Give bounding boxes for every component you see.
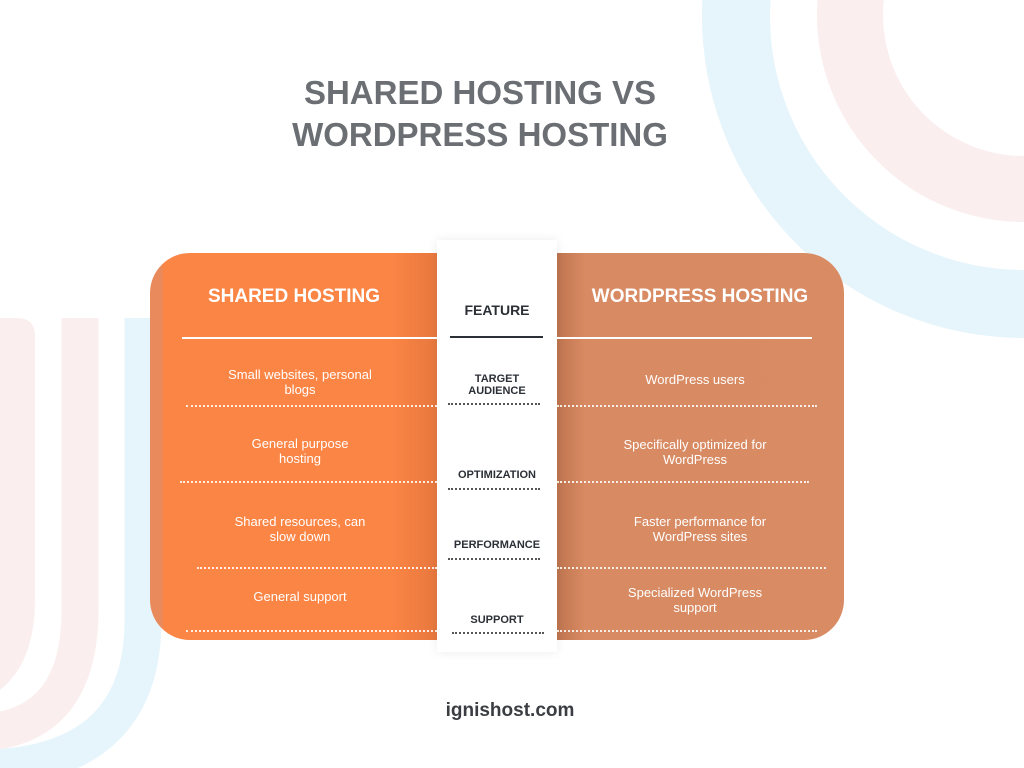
text: WordPress sites — [653, 529, 747, 544]
text: blogs — [284, 382, 316, 397]
text: WordPress — [663, 452, 727, 467]
text: Small websites, personal — [228, 367, 372, 382]
title: WORDPRESS HOSTING — [292, 116, 668, 153]
panel: shared hosting — [150, 253, 450, 640]
panel: wordpress hosting — [550, 253, 844, 640]
row: target audience — [228, 367, 745, 397]
text: TARGET — [475, 373, 519, 385]
text: OPTIMIZATION — [458, 469, 536, 481]
text: SUPPORT — [470, 614, 524, 626]
header: feature: FEATURE — [464, 302, 530, 318]
text: WordPress users — [645, 372, 745, 387]
feature column — [437, 240, 557, 652]
text: support — [673, 600, 717, 615]
row: optimization — [252, 436, 767, 481]
header: shared hosting: SHARED HOSTING — [208, 286, 380, 307]
text: General support — [253, 589, 347, 604]
footer url: ignishost.com — [446, 700, 574, 721]
title: SHARED HOSTING VS — [304, 74, 656, 111]
text: Specifically optimized for — [623, 437, 767, 452]
text: AUDIENCE — [468, 385, 526, 397]
row: performance — [235, 514, 766, 551]
text: Faster performance for — [634, 514, 766, 529]
title — [292, 74, 668, 153]
text: slow down — [270, 529, 330, 544]
text: hosting — [279, 451, 321, 466]
comparison table — [150, 240, 844, 652]
text: PERFORMANCE — [454, 539, 540, 551]
row: support — [253, 585, 762, 626]
text: General purpose — [252, 436, 348, 451]
text: Shared resources, can — [235, 514, 365, 529]
text: Specialized WordPress — [628, 585, 762, 600]
header: wordpress hosting: WORDPRESS HOSTING — [592, 286, 808, 307]
